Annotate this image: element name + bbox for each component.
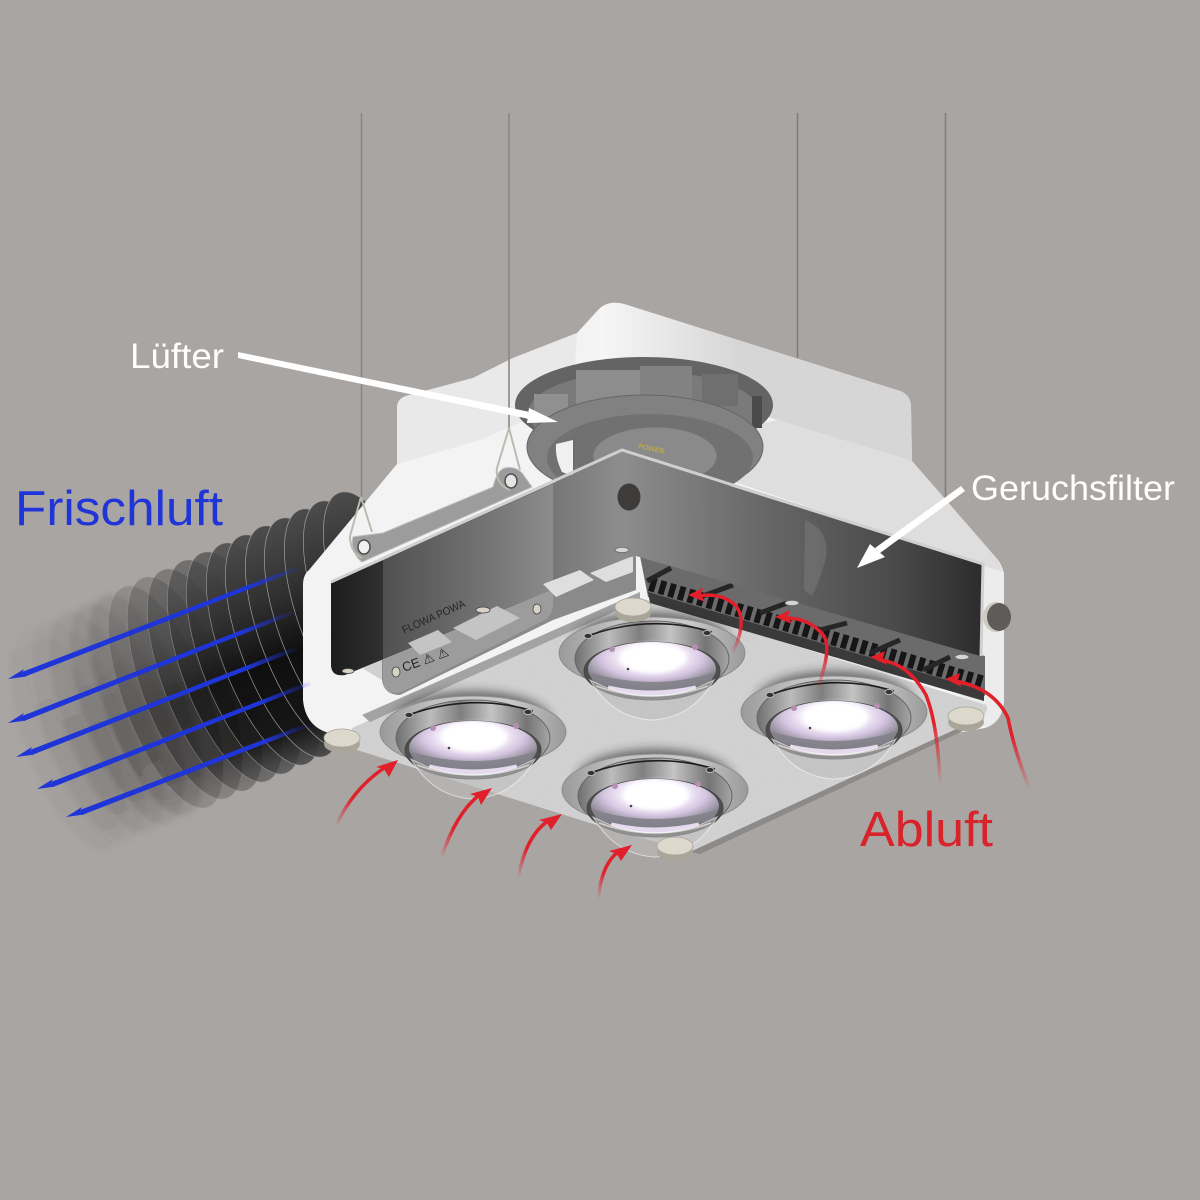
nameplate text: FLOWA POWA <box>400 598 468 637</box>
hanging bracket <box>352 468 532 562</box>
LED lens: right <box>741 671 927 779</box>
blue fresh air arrows <box>8 565 311 817</box>
bracket hole right <box>505 474 517 488</box>
fan hub <box>593 427 717 485</box>
panel: white lamp housing <box>303 303 1004 736</box>
filter dark dividers <box>647 568 950 670</box>
ghosted far ribs <box>0 580 227 864</box>
carbon odor filter strip <box>640 556 985 701</box>
fan inner bowl <box>547 414 753 502</box>
right glass pane <box>616 452 982 656</box>
label: Frischluft: Frischluft <box>15 482 223 536</box>
screws on right pane <box>615 547 969 660</box>
glass lower rim <box>362 592 640 722</box>
compliance marks: CE ⚠ ⚠ <box>400 644 451 675</box>
panel: left glass side <box>331 452 640 722</box>
arrow: Geruchsfilter pointer <box>857 486 965 568</box>
dark corner fixing <box>617 483 641 511</box>
plate lower edge shadow <box>690 718 982 854</box>
filter glass top <box>640 556 985 696</box>
panel: right glass side <box>331 450 1011 660</box>
glass top edge <box>331 450 983 656</box>
right side fixing <box>983 602 1011 632</box>
metal base plate <box>352 598 987 852</box>
LED lens: top <box>559 612 745 720</box>
filter reflection <box>804 520 827 596</box>
lighter glass plate behind pane <box>383 484 553 693</box>
label: Lüfter: Lüfter <box>130 337 224 376</box>
housing silhouette <box>303 303 1004 736</box>
LED lens: left <box>380 691 566 799</box>
rear suspension wires <box>798 113 946 500</box>
lower see-through area <box>345 556 636 695</box>
fan blades <box>528 366 762 455</box>
ducting hose: corrugated fresh air tube fading out <box>0 478 462 864</box>
fan lower ring <box>527 395 763 499</box>
front suspension wires with loops <box>350 113 520 558</box>
LED lens: bottom <box>562 749 748 857</box>
label: Abluft: Abluft <box>860 803 993 857</box>
light label patches <box>362 556 633 680</box>
label: Geruchsfilter: Geruchsfilter <box>971 469 1175 508</box>
rear wall right <box>600 303 912 461</box>
filter teeth <box>650 584 984 683</box>
underside right <box>640 420 1002 572</box>
left glass pane <box>331 452 636 675</box>
bracket bar <box>352 468 532 562</box>
fan <box>515 357 773 502</box>
bracket holes <box>358 540 370 554</box>
right frame <box>960 566 1004 728</box>
fan outer rim <box>515 357 773 453</box>
rear wall left <box>397 333 577 464</box>
red exhaust arrows: into filter <box>688 588 1030 790</box>
gap showing white housing <box>556 440 573 476</box>
plate thumb bolts <box>324 598 984 861</box>
fan brand text: POWER <box>638 443 665 456</box>
filter base band <box>648 592 984 701</box>
plate screws <box>342 604 541 677</box>
arrow: Lüfter pointer <box>238 352 558 423</box>
red exhaust arrows: bottom intake <box>336 760 632 898</box>
